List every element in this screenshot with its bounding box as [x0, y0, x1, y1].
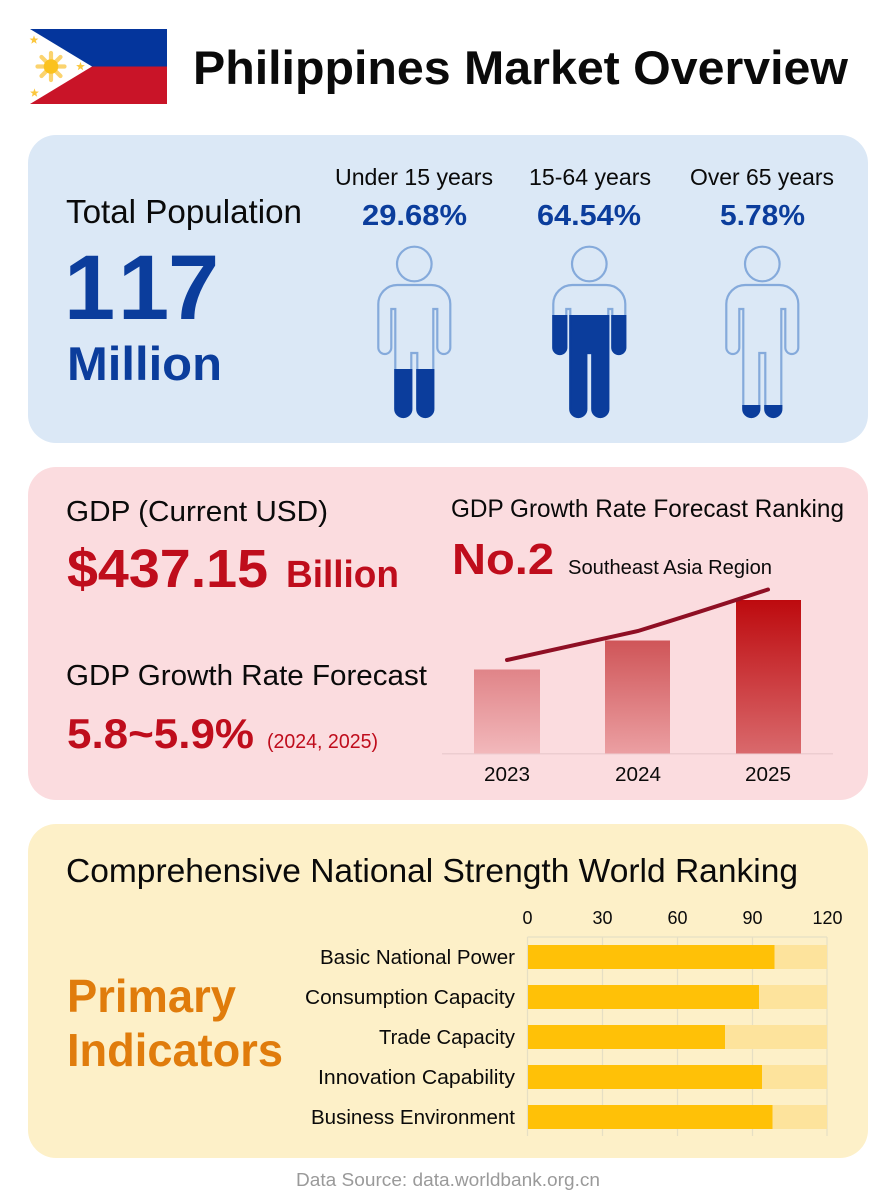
heading: national strength ranking: Comprehensive National Strength World Ranking	[66, 852, 798, 889]
age group: 15-64: 64.54%	[537, 200, 641, 232]
age group: under 15: Under 15 years	[335, 164, 493, 190]
panel: national strength	[28, 824, 868, 1158]
bar chart: indicators	[305, 908, 842, 1136]
bar chart: indicators: Trade Capacity	[379, 1027, 515, 1049]
bar chart: indicators: 60	[668, 908, 688, 928]
bar chart: indicators: 0	[522, 908, 532, 928]
label: primary indicators	[67, 970, 283, 1076]
label: primary indicators: Indicators	[67, 1024, 283, 1076]
bar chart: indicators: Consumption Capacity	[305, 987, 515, 1009]
bar chart: indicators: 30	[592, 908, 612, 928]
note: forecast years: (2024, 2025)	[267, 731, 378, 753]
age group: over 65: 5.78%	[720, 200, 805, 232]
stat: rank: No.2	[452, 535, 554, 584]
icon: Philippine flag	[30, 29, 167, 104]
stat unit: billion: Billion	[286, 554, 399, 596]
age group: under 15: 29.68%	[362, 200, 467, 232]
note: region: Southeast Asia Region	[568, 557, 772, 579]
panel: GDP	[28, 467, 868, 800]
title: Philippines Market Overview	[193, 41, 848, 94]
data source: Data Source: data.worldbank.org.cn	[296, 1170, 600, 1190]
stat unit: million: Million	[67, 337, 222, 390]
bar chart: GDP growth	[442, 590, 833, 786]
heading: ranking: GDP Growth Rate Forecast Ranking	[451, 495, 844, 523]
heading: GDP current USD: GDP (Current USD)	[66, 496, 328, 528]
stat: 117: 117	[64, 237, 219, 339]
age group: 15-64: 15-64 years	[529, 164, 651, 190]
stat: growth rate: 5.8~5.9%	[67, 710, 254, 757]
heading: GDP growth rate forecast: GDP Growth Rate Forecast	[66, 660, 427, 692]
bar chart: GDP growth: 2023	[484, 764, 530, 786]
bar chart: GDP growth: 2025	[745, 764, 791, 786]
bar chart: GDP growth: 2024	[615, 764, 661, 786]
bar chart: indicators: Basic National Power	[320, 947, 515, 969]
bar chart: indicators: 120	[812, 908, 842, 928]
age group: under 15	[335, 164, 493, 417]
age group: over 65	[690, 164, 834, 417]
bar chart: indicators: 90	[742, 908, 762, 928]
label: primary indicators: Primary	[67, 970, 236, 1022]
bar chart: indicators: Innovation Capability	[318, 1067, 515, 1089]
panel: population	[28, 135, 868, 443]
bar chart: indicators: Business Environment	[311, 1107, 515, 1129]
stat: GDP value: $437.15	[67, 539, 268, 599]
age group: over 65: Over 65 years	[690, 164, 834, 190]
age group: 15-64	[529, 164, 651, 417]
heading: total population: Total Population	[66, 193, 302, 230]
